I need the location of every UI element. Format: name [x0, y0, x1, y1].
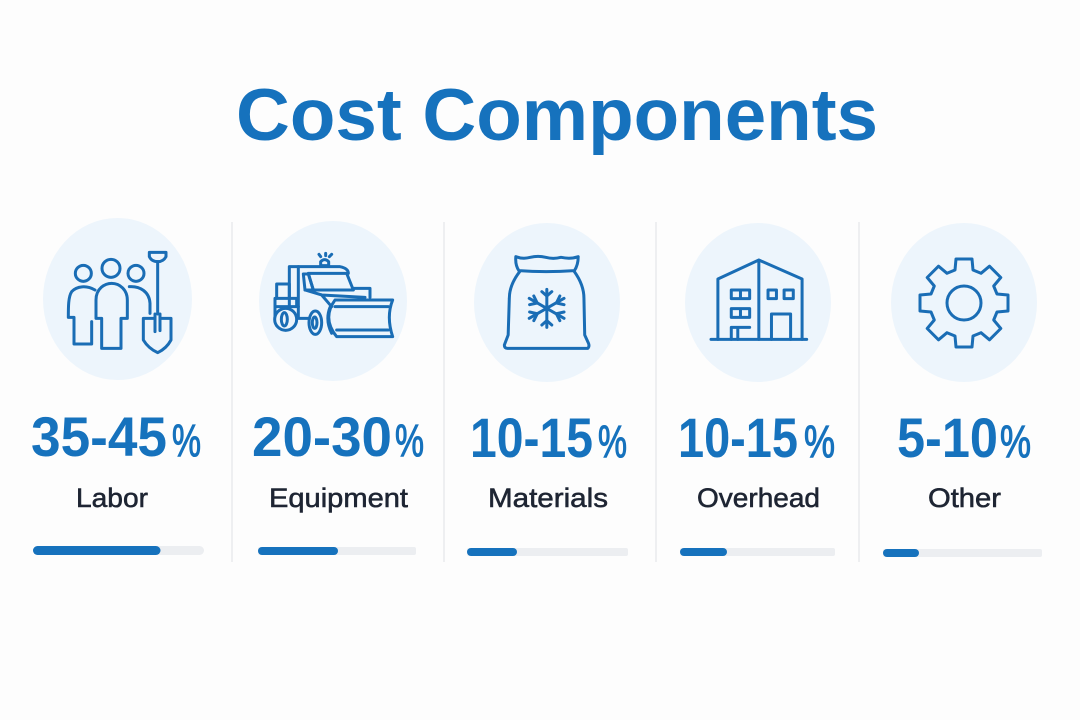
progress bar: overhead [680, 548, 835, 556]
progress bar: materials [467, 548, 628, 556]
value: 10-15%: % [804, 416, 835, 467]
icon: building [685, 223, 831, 382]
panel: labor [31, 218, 204, 555]
label: Labor: Labor [76, 483, 148, 513]
value: 5-10%: % [1000, 416, 1031, 467]
panel: equipment [252, 221, 424, 555]
panel: overhead [678, 223, 835, 556]
label: Overhead: Overhead [697, 483, 820, 513]
value: 20-30%: % [395, 415, 424, 466]
value: 35-45%: % [172, 415, 201, 466]
value: 10-15%: 10-15 [678, 406, 798, 469]
value: 10-15%: 10-15 [470, 406, 593, 469]
icon: salt bag with snowflake [474, 223, 620, 382]
progress bar: equipment [258, 547, 416, 555]
label: Materials: Materials [488, 483, 608, 513]
icon: gear [891, 223, 1037, 382]
icon: snow plow truck [259, 221, 407, 381]
value: 20-30%: 20-30 [252, 405, 392, 468]
progress bar: other [883, 549, 1042, 557]
label: Equipment: Equipment [269, 483, 409, 513]
value: 10-15%: % [598, 416, 627, 467]
progress bar: labor [33, 546, 204, 555]
panel: materials [467, 223, 628, 556]
icon: workers with shovel [43, 218, 192, 380]
panel: other [883, 223, 1042, 557]
value: 35-45%: 35-45 [31, 405, 167, 468]
title: Cost Components [236, 75, 878, 156]
label: Other: Other [928, 483, 1001, 513]
value: 5-10%: 5-10 [897, 406, 998, 469]
